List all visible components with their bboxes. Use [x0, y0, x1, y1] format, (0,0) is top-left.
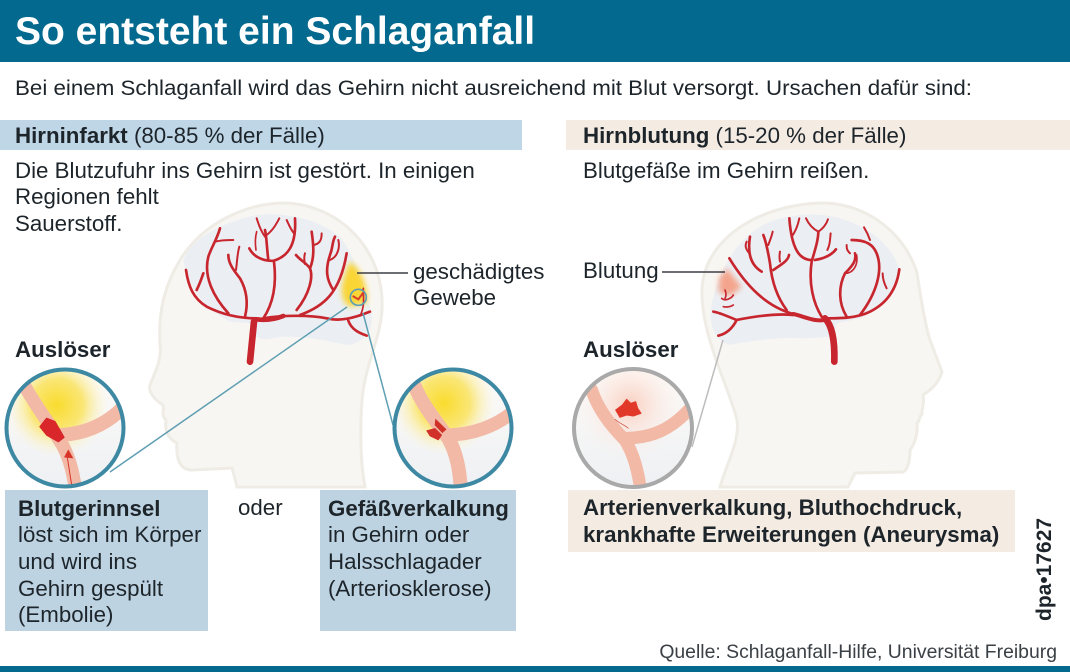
line to bleeding circle: [692, 340, 723, 447]
box: Blutgerinnsel: (Embolie): [18, 602, 113, 627]
credit: dpa: dpa•17627: [1033, 518, 1056, 621]
heading: Hirninfarkt: [0, 120, 522, 150]
text: oder: oder: [238, 495, 283, 520]
title banner: So entsteht ein Schlaganfall: [15, 10, 535, 53]
leader: damaged tissue: [357, 272, 408, 274]
circle: embolism detail: [4, 368, 126, 488]
title banner: [0, 0, 1070, 62]
plaque: [427, 419, 446, 440]
head silhouette left: [150, 203, 382, 487]
text: Hirnblutung description: Blutgefäße im Gehirn reißen.: [583, 158, 869, 183]
box: Blutgerinnsel: und wird ins: [18, 549, 137, 574]
label: geschädigtes Gewebe: geschädigtes: [413, 259, 544, 284]
text: Hirninfarkt description: Die Blutzufuhr ins Gehirn ist gestört. In einigen: [15, 158, 475, 183]
box: Blutgerinnsel: [5, 490, 208, 631]
circle: bleeding detail: [572, 367, 694, 489]
box: Blutgerinnsel: Blutgerinnsel: [18, 496, 160, 521]
heading: Auslöser right: Auslöser: [583, 337, 679, 362]
illustration: left head with brain arteries: [150, 203, 382, 487]
box: Blutgerinnsel: Gehirn gespült: [18, 576, 164, 601]
damaged tissue patch: [342, 262, 367, 307]
box: Gefäßverkalkung: [320, 490, 516, 631]
brain and arteries right: [711, 215, 899, 362]
heading: Auslöser left: Auslöser: [15, 337, 111, 362]
connector lines: [110, 272, 725, 472]
box: Gefäßverkalkung: Halsschlagader: [328, 549, 482, 574]
text: Hirninfarkt description: Sauerstoff.: [15, 211, 122, 236]
circle: calcification detail: [392, 368, 514, 488]
heading: Hirnblutung: [566, 120, 1070, 150]
line to embolism circle: [110, 307, 347, 472]
box: Arterienverkalkung: krankhafte Erweiterungen (Aneurysma): [583, 522, 999, 547]
box: Gefäßverkalkung: in Gehirn oder: [328, 522, 469, 547]
intro text: Bei einem Schlaganfall wird das Gehirn nicht ausreichend mit Blut versorgt. Ursachen dafür sind:: [15, 75, 972, 100]
leader: bleeding: [662, 271, 725, 273]
label: Blutung: Blutung: [583, 258, 659, 283]
box: Gefäßverkalkung: (Arteriosklerose): [328, 576, 492, 601]
heading: Hirnblutung: Hirnblutung (15-20 % der Fälle): [583, 123, 906, 148]
box: Blutgerinnsel: löst sich im Körper: [18, 522, 201, 547]
clot: [40, 418, 64, 442]
box: Gefäßverkalkung: Gefäßverkalkung: [328, 496, 509, 521]
blockage marker: [350, 289, 366, 305]
text: Hirninfarkt description: Regionen fehlt: [15, 184, 160, 209]
label: geschädigtes Gewebe: Gewebe: [413, 285, 496, 310]
box: Arterienverkalkung: [568, 490, 1015, 552]
brain and arteries left: [183, 214, 372, 362]
illustration: right head with brain arteries: [702, 203, 942, 487]
footer band: [0, 666, 1070, 672]
head silhouette right: [702, 203, 942, 487]
line to calcification circle: [363, 313, 393, 425]
heading: Hirninfarkt: Hirninfarkt (80-85 % der Fälle): [15, 123, 325, 148]
source: Quelle: Schlaganfall-Hilfe, Universität Freiburg: [659, 641, 1057, 663]
bleeding patch: [718, 268, 742, 296]
bleed: [616, 399, 641, 417]
box: Arterienverkalkung: Arterienverkalkung, Bluthochdruck,: [583, 495, 962, 520]
